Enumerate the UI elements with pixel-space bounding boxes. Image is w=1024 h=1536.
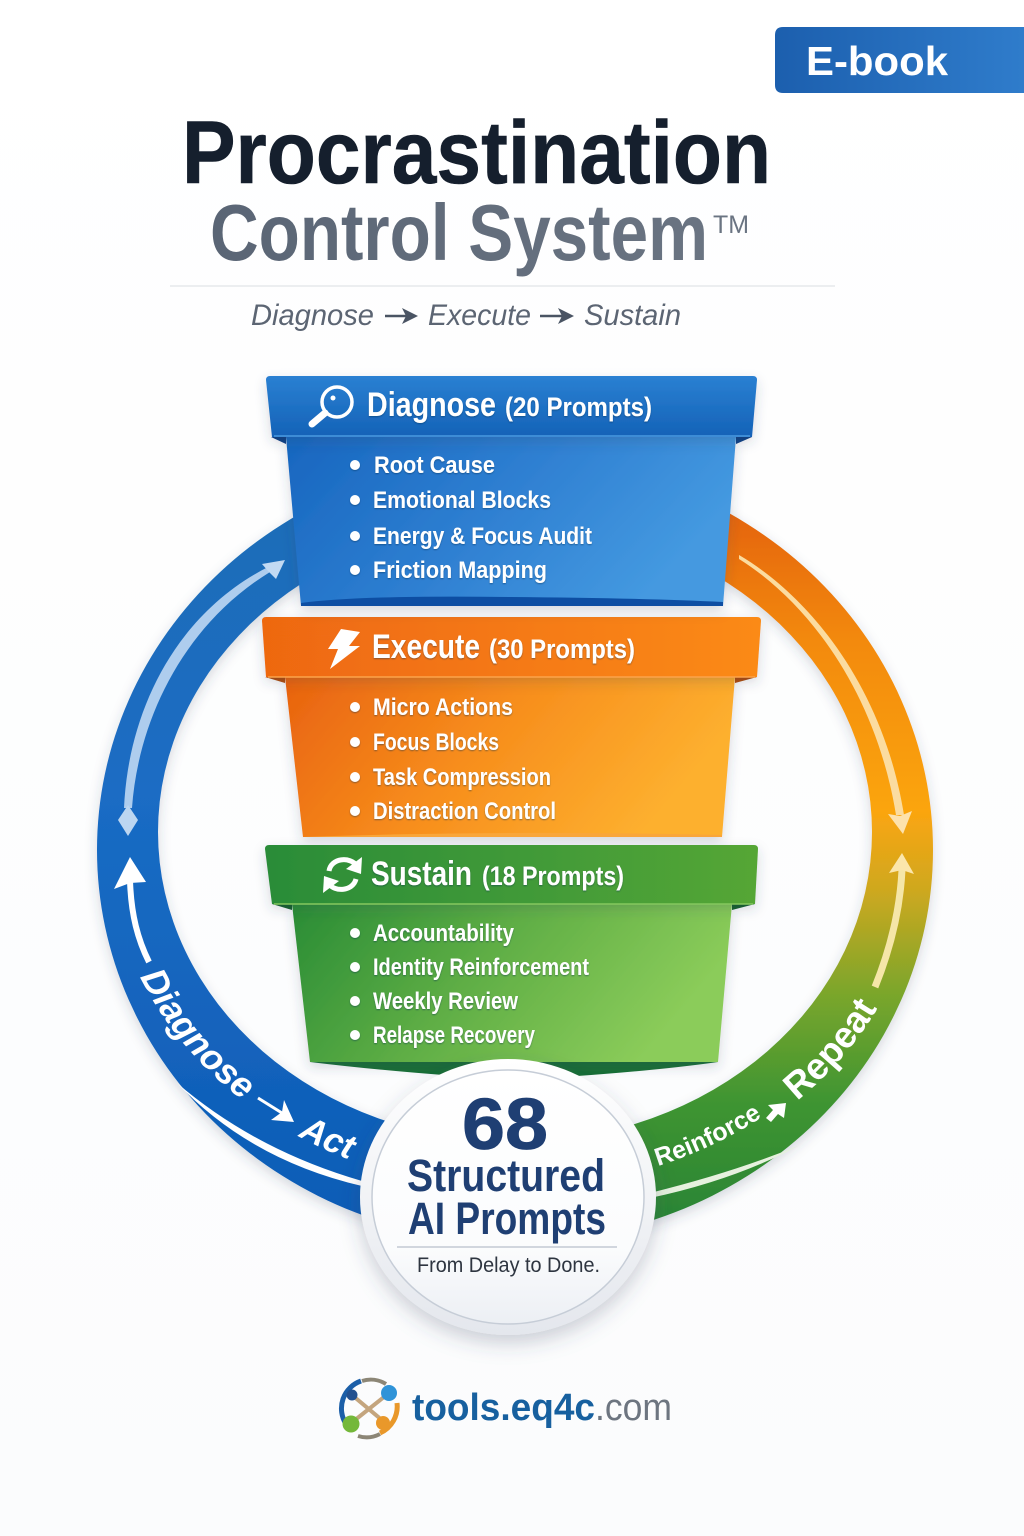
cycle ring: left blue arc [92,516,385,1226]
ring text: Reinforce to Repeat: Repeat [782,998,877,1100]
title: Control System [210,188,708,277]
heading: Diagnose: (20 Prompts) [505,392,652,422]
heading: Sustain: Sustain [371,855,472,893]
badge: 68 Structured AI Prompts [360,1059,656,1335]
badge: 68 Structured AI Prompts: From Delay to Done. [417,1254,600,1277]
title: Procrastination [182,102,771,202]
ring text: Diagnose to Act [140,970,358,1159]
arrow: light upper blue arc [118,560,285,836]
list: Diagnose items: Root Cause [374,452,495,479]
subtitle: Diagnose, Execute, Sustain: Diagnose [251,299,374,332]
heading: Execute [372,628,635,666]
arrow: white upward arrow [114,857,149,962]
badge: 68 Structured AI Prompts: Structured [407,1150,605,1201]
icon: lightning bolt [328,629,360,669]
ring text: Reinforce to Repeat [654,998,877,1166]
panel: Diagnose [266,376,757,606]
list: Execute items: Task Compression [373,764,551,791]
logo: tools.eq4c.com: tools.eq4c [412,1387,595,1429]
icon: magnifying glass [312,387,352,424]
heading: Execute: Execute [372,628,480,666]
heading: Diagnose [367,386,652,424]
title: TM [713,211,749,239]
heading: Sustain: (18 Prompts) [482,861,624,891]
heading: Execute: (30 Prompts) [489,634,635,664]
subtitle: Diagnose, Execute, Sustain [251,299,681,332]
list: Sustain items: Weekly Review [373,988,518,1015]
arrow: light orange downward arc [739,555,912,834]
swoosh: lower green [650,1145,800,1198]
panel: Execute [262,617,761,837]
title [182,102,771,277]
E-book tab [775,27,1024,93]
subtitle: Diagnose, Execute, Sustain: Execute [428,299,531,332]
icon: refresh arrows [323,857,362,893]
list: Sustain items: Accountability [373,920,515,947]
list: Sustain items: Relapse Recovery [373,1022,536,1049]
arrow: light upward arc [875,853,914,987]
subtitle: Diagnose, Execute, Sustain: Sustain [584,299,681,332]
badge: 68 Structured AI Prompts: 68 [462,1085,548,1165]
heading: Sustain [371,855,624,893]
list: Diagnose items: Energy & Focus Audit [373,523,592,550]
logo: tools.eq4c.com [341,1380,672,1437]
icon: network logo [341,1380,397,1437]
list: Diagnose items: Friction Mapping [373,557,547,584]
ring text: Reinforce to Repeat: Reinforce [654,1108,760,1166]
list: Execute items: Focus Blocks [373,729,499,756]
list: Sustain items: Identity Reinforcement [373,954,589,981]
badge: 68 Structured AI Prompts: AI Prompts [408,1193,606,1244]
list: Diagnose items: Emotional Blocks [373,487,551,514]
swoosh: lower blue [177,1083,362,1186]
E-book tab: E-book [806,38,948,84]
list: Execute items: Distraction Control [373,798,556,825]
logo: tools.eq4c.com: .com [595,1387,672,1429]
list: Sustain items [350,920,589,1049]
panel: Sustain [265,845,758,1080]
ring text: Diagnose to Act: Diagnose [140,970,252,1096]
heading: Diagnose: Diagnose [367,386,496,424]
cycle ring: right orange to green arc [634,513,938,1231]
list: Execute items [350,694,556,825]
ring text: Diagnose to Act: Act [297,1120,358,1159]
list: Execute items: Micro Actions [373,694,513,721]
list: Diagnose items [350,452,592,584]
